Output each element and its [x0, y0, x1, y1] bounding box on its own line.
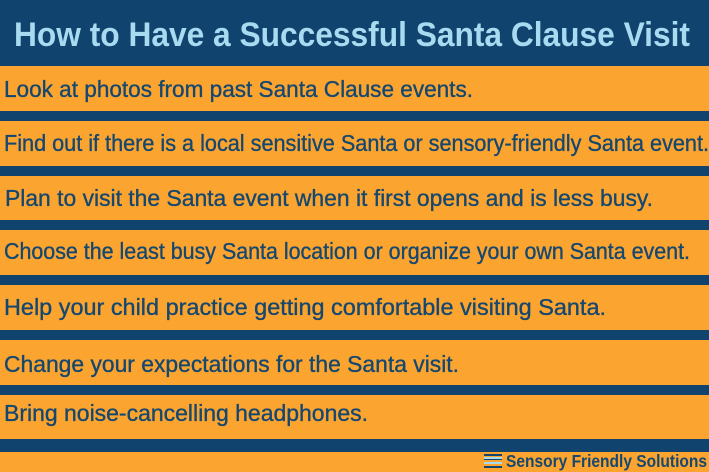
tip 5 [0, 285, 709, 330]
tip 6 [0, 340, 709, 385]
tip 5: Help your child practice getting comfortable visiting Santa. [4, 294, 606, 320]
tip 3 [0, 176, 709, 220]
icon: logo stripes [484, 454, 502, 468]
footer band [0, 451, 709, 472]
tip 7: Bring noise-cancelling headphones. [4, 400, 368, 426]
tip 2 [0, 121, 709, 166]
tip 4 [0, 230, 709, 275]
tip 6: Change your expectations for the Santa visit. [4, 351, 459, 377]
tip 1 [0, 66, 709, 111]
tip 1: Look at photos from past Santa Clause events. [4, 76, 473, 102]
tip 7 [0, 395, 709, 439]
tip 3: Plan to visit the Santa event when it first opens and is less busy. [5, 185, 653, 211]
